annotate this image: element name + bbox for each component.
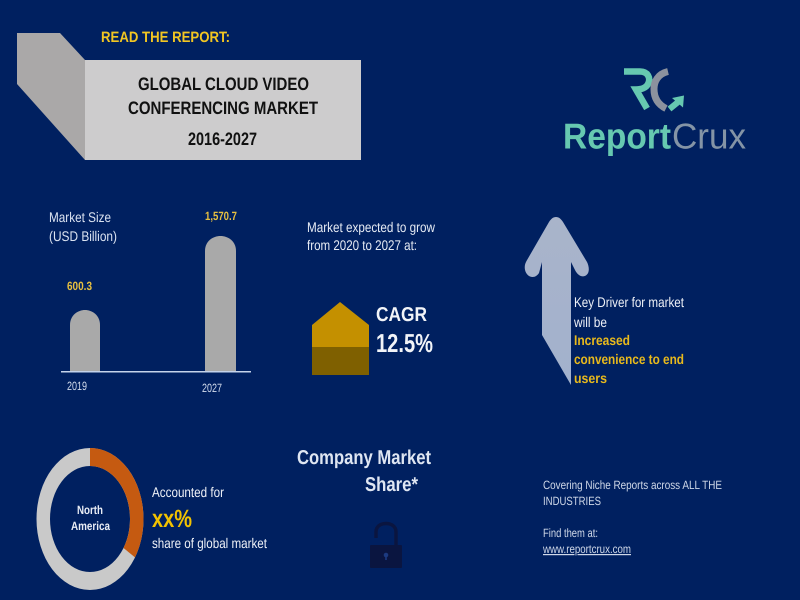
report label: READ THE REPORT:: [101, 29, 230, 46]
key driver text: Key Driver for market: [574, 294, 684, 310]
key driver text: Increased: [574, 332, 630, 348]
title text: CONFERENCING MARKET: [128, 98, 318, 118]
chart heading: [49, 209, 117, 244]
growth text: Market expected to grow: [307, 219, 436, 235]
title banner: [17, 33, 361, 160]
regional share text: Accounted for: [152, 484, 224, 500]
CAGR value: CAGR: [376, 304, 427, 326]
donut segment: [90, 448, 143, 557]
donut label: America: [71, 519, 110, 533]
donut label: [71, 503, 110, 533]
arrow: key driver: [525, 217, 589, 385]
title text: 2016-2027: [188, 129, 257, 149]
company market share heading: Share*: [365, 474, 418, 496]
growth text: from 2020 to 2027 at:: [307, 237, 417, 253]
key driver text: [573, 294, 684, 386]
key driver text: will be: [573, 314, 607, 330]
footer text: www.reportcrux.com: [542, 542, 631, 556]
footer text: INDUSTRIES: [543, 494, 601, 508]
axis label: 2019: 2019: [67, 379, 87, 393]
title text: GLOBAL CLOUD VIDEO: [138, 74, 309, 94]
company market share heading: Company Market: [297, 447, 431, 469]
title text: [128, 74, 318, 149]
axis line: [61, 371, 251, 372]
footer text: [542, 478, 722, 556]
icon: open padlock: [370, 524, 402, 568]
bar: 2027: [205, 236, 236, 372]
icon: RC monogram: [624, 72, 684, 109]
chart heading: Market Size: [49, 209, 111, 225]
key driver text: convenience to end: [574, 351, 684, 367]
logo: ReportCrux: [563, 72, 746, 156]
bar chart: market size: [49, 209, 251, 395]
growth text: [307, 219, 436, 253]
company market share heading: [297, 447, 431, 496]
axis label: 2027: 2027: [202, 381, 222, 395]
footer text: Covering Niche Reports across ALL THE: [543, 478, 722, 492]
donut chart: North America: [36, 448, 144, 590]
value: 600.3: 600.3: [67, 279, 92, 293]
regional share text: xx%: [152, 505, 192, 533]
regional share text: share of global market: [152, 535, 267, 551]
logo wordmark: [563, 116, 746, 156]
logo wordmark: Report: [563, 116, 671, 156]
logo wordmark: Crux: [672, 116, 746, 156]
value: 1,570.7: 1,570.7: [205, 209, 237, 223]
chart heading: (USD Billion): [49, 228, 117, 244]
CAGR value: 12.5%: [376, 328, 433, 358]
icon: CAGR house: [312, 302, 369, 375]
CAGR value: [376, 304, 433, 358]
regional share text: [152, 484, 267, 551]
bar: 2019: [70, 310, 100, 372]
key driver text: users: [574, 370, 607, 386]
donut label: North: [77, 503, 103, 517]
footer text: Find them at:: [543, 526, 598, 540]
